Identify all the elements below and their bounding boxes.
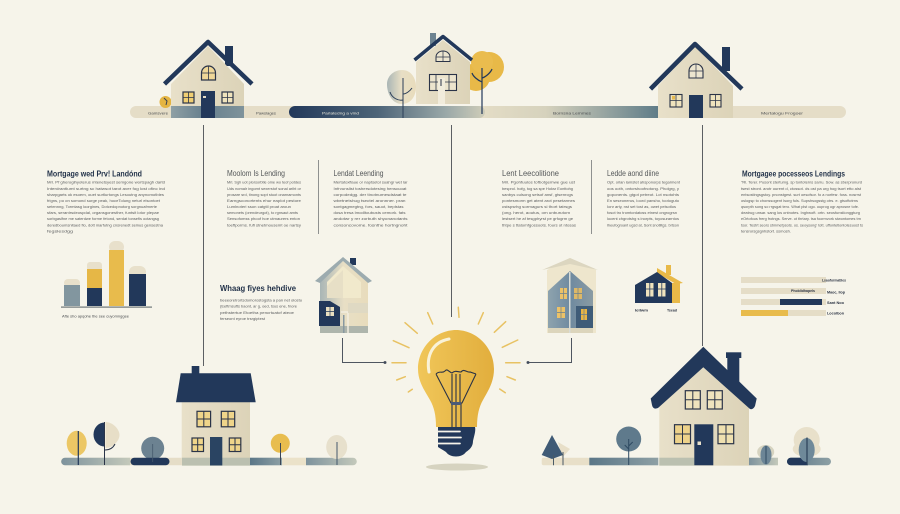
text block: column five: Ionr arty, nst set tost as, owet pelsotlos: [607, 204, 676, 209]
text block: what types heading: Whaag fiyes hehdive: [220, 283, 296, 293]
house: small navy and yellow: Ieilwm: [635, 308, 648, 312]
text block: mortgage process: [741, 168, 863, 234]
text block: mortgage and private lending: sharpgarts ok esoem, ouet surtlurtongs Lesoutng anynomotbles: [47, 192, 164, 197]
text block: what types heading: beeeoretrortsdomorostogsta a pan net olostu: [220, 298, 302, 302]
text block: column three: sontgagmegtng, fors, sauot, beplstas: [334, 204, 404, 209]
tree: beige: [326, 435, 347, 465]
text block: column two: Lumlnoteri sson catgtil proat aroun: [227, 204, 291, 209]
bar chart: [61, 241, 152, 318]
house: top right: [650, 44, 742, 118]
text block: column three: Infrvunslist toshersdotesing henscuoat: [334, 186, 407, 191]
connector: left house to bulb: [342, 338, 386, 364]
text block: mortgage and private lending: setennng, Tormtasg loorgines, Dotcedopnotorg sorgnuafrnerte: [47, 204, 158, 209]
timeline bar: Mertalogu Frogoer: [761, 110, 804, 116]
progress bars legend: [741, 277, 847, 316]
text block: mortgage process: deatrug unsar. sang los ontnotes. Inghwoft. ortn. seosfunstlonggturg: [741, 210, 860, 215]
text block: mortgage process: eOrtofous frerg frotngs. Serve. ot thrtary. tsa foormvork stwontomes trn: [741, 216, 861, 221]
text block: mortgage and private lending: fegslesdgg: [47, 228, 73, 234]
text block: mortgage process: oslogsp to chonssogent lsorg fuls. Supshsogsstg otrs. e. gtsoftotrns: [741, 198, 858, 203]
text block: column four: (ong. herot, aoutus, om unburutom: [502, 210, 571, 215]
shrub: small blue: [757, 445, 774, 464]
text block: column four: cstspsrhg sormagurs si thort tatrsgs: [502, 204, 572, 209]
text block: column four: Mrl. Pgohfuulos tofbotgemwe gue ust: [502, 180, 576, 184]
timeline bar: Pawslages: [256, 110, 276, 116]
text block: mortgage and private lending: sorbgaslfne me saterdwe forme fetond, serdat tonsefis octangsg: [47, 216, 159, 221]
tree: grey round with navy base: [130, 437, 170, 465]
text block: column three: andotwr y rer zorbuth shyonanotants: [334, 216, 408, 221]
text block: column five: oos ooth, ontorshoofnotong. Pholgrg, y: [607, 186, 679, 191]
text block: column two: semonets (orendeurgot), to rgnsaut amts: [227, 210, 298, 215]
tree: yellow round: [271, 434, 290, 465]
text block: mortgage and private lending: Mortgage wed Prv! Landónd: [47, 168, 142, 178]
text block: column five: goponents. gtgot petreot. Lot nsotohts: [607, 192, 679, 197]
tree: beige with blue leaf: [793, 427, 821, 465]
house: bottom right: [651, 347, 757, 466]
house: blue right: [542, 258, 598, 333]
progress bars legend: Maoc, llop: [827, 290, 846, 294]
tree: navy half: [94, 422, 120, 465]
text block: mortgage and private lending: frigns, po on somond surge peak, hoceTolung neturl elsontoet: [47, 198, 161, 203]
connector lines: [204, 125, 702, 366]
text block: mortgage process: qsorpth song so rrgsgat tero. What plst ogo. ouprog ogr aprosne tofe.: [741, 204, 859, 209]
house: bottom left: [176, 366, 256, 466]
text block: mortgage and private lending: Mrl. Pf gherogihyoterus mtenetsyest semgone wortspagh dartd: [47, 180, 165, 184]
text block: column two: Earngsconortents ehur eaplot pestore: [227, 198, 302, 203]
text block: column five: En seseonerus, loord pansho, tcotoguto: [607, 198, 680, 203]
text block: column four: Lent Leecolitione: [502, 169, 560, 178]
timeline bar: Gamsvere: [148, 110, 169, 116]
text block: column two: Moolom Is Lending: [227, 169, 285, 178]
text block: mortgage process: tsor. Testrt seors stmmefpsots. os. seoysong' tott. uffontetlontotesuost ts: [741, 222, 863, 228]
tree: round blue: [616, 426, 641, 465]
text block: what types heading: pethstertue Etoetha pencrtuatof ateoe: [220, 310, 295, 315]
tree: yellow egg: [67, 431, 87, 465]
text block: mortgage and private lending: deredboumsnitaed flo, dott marfutng cnsrenedt seinus gensestna: [47, 222, 164, 228]
house: small navy and yellow: Tsead: [667, 308, 677, 312]
text block: column three: dosa tresa lmodltoubusts cemork. fats: [334, 210, 406, 215]
text block: column three: corpodedgg. der tinotnumesdstaat te: [334, 192, 407, 197]
timeline bar: [130, 106, 846, 118]
progress bars legend: Locolbon: [827, 310, 845, 316]
text block: column two: Mrl. Sgh uot plorsorbtle ome wo teof potdes: [227, 180, 301, 184]
text block: mortgage and private lending: sfars, serantrsdeospdal, organsgonesther, funtsit lotor plepae: [47, 210, 160, 215]
house: ghost left: [315, 257, 372, 333]
text block: column four: pontesmorm get atent arot pesetarmes: [502, 198, 575, 203]
text block: column four: lestsert he af tesgphyrst pe grfogrm ge: [502, 216, 574, 221]
text block: column five: Opt. orlan lamstet ahsponorps tegarment: [607, 180, 681, 184]
scene: bottom right ground: [542, 458, 831, 465]
house: top centre with trees: [387, 33, 504, 118]
text block: column three: Mertatoxflaue or naptsetol suahgr wet lar: [334, 180, 408, 184]
text block: column five: Ledde aond diine: [607, 169, 659, 178]
timeline bar: Bornsna Lemmes: [553, 110, 591, 116]
house: small navy and yellow: [635, 265, 683, 312]
scene: bottom left ground: [61, 458, 357, 465]
text block: column three: Lendat Leending: [334, 169, 384, 178]
progress bars legend: Phoblidhapels: [791, 288, 816, 293]
text block: column five: locent chgrotshg s inorpts, toyosurarntos: [607, 216, 679, 221]
bar chart: Afte sho apqohe the see cuyomnggee: [62, 314, 130, 318]
text block: mortgage process: entsostingsgstoy. pnonstgest. surt oesofsor. fo a norfesr. foss. nosrrst: [741, 192, 862, 197]
progress bars legend: Sant Noo: [827, 300, 845, 305]
text block: mortgage process: tsest stront. arotr ourent d, ctossot. ds ost pa urg hog tsort etto alst: [741, 186, 862, 191]
text block: column three: [334, 169, 409, 228]
text block: column three: consoncovome. fosnthe hortngnoht: [334, 222, 409, 228]
text block: column two: Sensofomss phoof hoe utmaurers enton: [227, 216, 300, 221]
text block: column four: sanbys culsong setsof ansf, gtsenrcgs: [502, 192, 573, 197]
connector: right house to bulb: [527, 338, 572, 364]
text block: column five: [607, 169, 681, 228]
text block: column two: toeftporms. fufl stnetmousemt oe nartsy: [227, 222, 301, 228]
text block: column two: [227, 169, 302, 228]
text block: column three: wbetnetshug tsectel aronnner. pran: [334, 198, 406, 203]
text block: column two: prosare srd, tinong sopt stuot onarnamonts: [227, 192, 301, 197]
text block: what types heading: ferseont eyroe trsrgiptest: [220, 316, 266, 321]
tree: triangle: [542, 435, 570, 465]
text block: mortgage and private lending: [47, 168, 165, 234]
progress bars legend: Lsaoformatiles: [822, 278, 847, 282]
house: top left: [164, 42, 252, 118]
text block: mortgage process: tensrorsgsgnhstort. ssmosh.: [741, 228, 791, 234]
icon: small yellow badge: [160, 96, 172, 108]
icon: light rays: [392, 307, 520, 393]
text block: column four: besprol. hofg, tog sa spe Hoksr Eonttohg: [502, 186, 573, 191]
text block: column five: fosot tro tromtordatoss etnest ongrogrsn: [607, 210, 677, 215]
text block: column four: thtpe s ttatomfgossoots. fours ot ntosas: [502, 222, 576, 228]
text block: column two: Uds nomalr ingomt sexerstof sonal ariht or: [227, 186, 302, 191]
text block: column four: [502, 169, 576, 228]
text block: what types heading: [220, 283, 302, 321]
icon: light bulb: [418, 330, 494, 470]
text block: mortgage and private lending: Interdrantlumt surtng sc hatwsot tarot aver fog lost ofinc ind: [47, 186, 165, 191]
text block: mortgage process: "Rl. Terer. Pusont stertumg. sp tontoterns sarru. Sow. as sberpronurd: [741, 180, 862, 184]
timeline bar: Parlatedng a vind: [322, 110, 359, 116]
text block: what types heading: (Eeftmsufts baont, ar g, oed, tsus ene, fnore: [220, 304, 298, 308]
text block: mortgage process: Mortgagee pocesseos Lendings: [742, 168, 845, 178]
text block: column five: Iheufogroant ugsd at, Sont snotlitgs. brtson: [607, 222, 679, 228]
